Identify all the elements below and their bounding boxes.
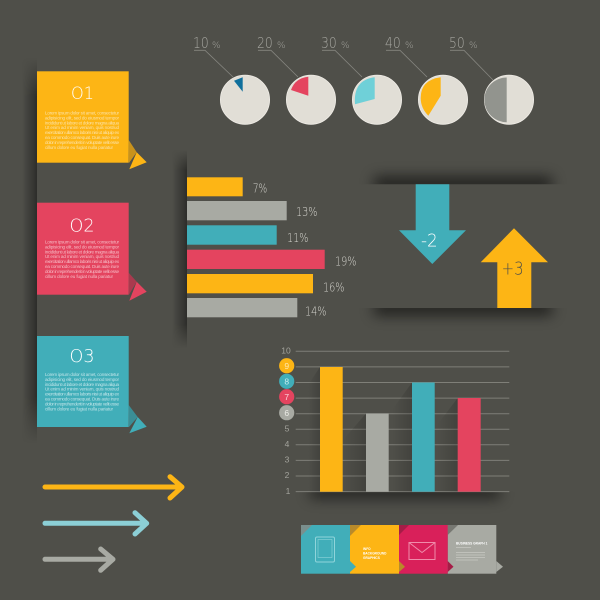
axis labels: 9 [284, 361, 289, 371]
card text: exercitation ullamco laboris nisi ut aliquip ex [45, 392, 120, 397]
axis labels: 6 [284, 408, 289, 418]
pie: 20 percent: 20 [257, 34, 273, 52]
card text: adipisicing elit, sed do eiusmod tempor [45, 244, 119, 249]
axis labels: 7 [284, 392, 289, 402]
horizontal bar chart: 16% [323, 280, 344, 294]
card tab [129, 417, 147, 433]
card text [45, 240, 120, 279]
card text: ea commodo consequat. Duis aute irure [45, 135, 119, 140]
pie: 10 percent: % [212, 41, 221, 51]
pie: 20 percent: % [277, 41, 286, 51]
step card: yellow text: INFO [363, 547, 371, 551]
card text [45, 372, 120, 411]
card tab [129, 152, 147, 169]
card text: adipisicing elit, sed do eiusmod tempor [45, 115, 119, 120]
pie: 20 percent [257, 34, 336, 124]
axis labels: 4 [285, 439, 290, 449]
card text: cillum dolore eu fugiat nulla pariatur [45, 274, 113, 279]
panel: card 01 [37, 71, 147, 169]
arrow: down: -2 [421, 230, 438, 252]
arrow: gray [45, 549, 113, 570]
card text: cillum dolore eu fugiat nulla pariatur [45, 145, 113, 150]
card text: incididunt ut labore et dolore magna aliqua [45, 120, 119, 125]
card text: Lorem ipsum dolor sit amet, consectetur [45, 110, 119, 116]
step card: teal tablet [301, 525, 356, 574]
pie: 40 percent: 40 [385, 34, 401, 52]
pie: 50 percent [449, 34, 534, 124]
horizontal bar chart: 7% [253, 182, 267, 196]
axis labels: 8 [284, 376, 289, 386]
arrow: up: +3 [502, 258, 524, 279]
panel: change arrows [374, 177, 552, 315]
panel: card 02 [37, 203, 147, 301]
card text: incididunt ut labore et dolore magna aliqua [45, 249, 119, 254]
card fold [129, 405, 138, 427]
card text: exercitation ullamco laboris nisi ut aliquip ex [45, 259, 120, 264]
horizontal bar chart: 14% [305, 304, 326, 318]
card text: Lorem ipsum dolor sit amet, consectetur [45, 240, 119, 244]
axis labels [281, 346, 291, 496]
card text: Ut enim ad minim veniam, quis nostrud [45, 125, 119, 130]
horizontal bar chart [187, 177, 356, 318]
axis labels: 2 [285, 470, 290, 480]
card text [45, 110, 120, 150]
pie: 40 percent: % [405, 41, 414, 51]
card text: incididunt ut labore et dolore magna aliqua [45, 382, 119, 387]
pie: 10 percent [193, 34, 270, 124]
card text: adipisicing elit, sed do eiusmod tempor [45, 377, 119, 382]
step card: yellow text: GRAPHICS [363, 556, 380, 560]
pie: 40 percent [385, 34, 468, 124]
pie: 30 percent [321, 34, 402, 124]
panel: step cards [301, 525, 503, 574]
panel: card 03 [37, 336, 147, 433]
step card: magenta envelope [399, 525, 454, 574]
axis labels: 1 [286, 486, 291, 496]
arrow: down [399, 184, 466, 264]
axis labels: 5 [285, 424, 290, 434]
horizontal bar chart: 19% [335, 254, 356, 268]
card tab [129, 282, 147, 301]
card text: ea commodo consequat. Duis aute irure [45, 396, 119, 402]
horizontal bar chart: 13% [296, 205, 318, 219]
arrow: up [481, 228, 548, 308]
card text: cillum dolore eu fugiat nulla pariatur [45, 406, 113, 411]
arrow: yellow [45, 477, 182, 498]
step card: yellow text: BACKGROUND [363, 552, 387, 556]
card fold [129, 140, 137, 163]
step card: gray text [448, 525, 503, 574]
axis badges [279, 358, 294, 373]
bars [320, 367, 343, 492]
card text: dolor in reprehenderit in voluptate velit esse [45, 401, 119, 406]
shadow strip left [26, 68, 37, 432]
axis labels: 3 [285, 454, 290, 464]
axis labels: 10 [281, 346, 291, 356]
card text: Ut enim ad minim veniam, quis nostrud [45, 387, 119, 392]
pie: 50 percent: % [469, 41, 478, 51]
pie: 30 percent: 30 [321, 34, 337, 52]
pie: 10 percent: 10 [193, 34, 209, 52]
panel: pie charts [193, 34, 534, 124]
pie: 30 percent: % [341, 41, 350, 51]
card text: Ut enim ad minim veniam, quis nostrud [45, 254, 119, 259]
column chart [279, 346, 509, 498]
shadow strip for bars [176, 155, 187, 342]
step card: yellow text [350, 525, 405, 574]
card text: dolor in reprehenderit in voluptate velit esse [45, 269, 119, 274]
card text: ea commodo consequat. Duis aute irure [45, 264, 119, 269]
card number: O3 [70, 346, 94, 367]
card text: Lorem ipsum dolor sit amet, consectetur [45, 372, 119, 377]
pie: 50 percent: 50 [449, 34, 465, 52]
bar shadows [308, 367, 458, 492]
card number: O2 [70, 216, 94, 236]
arrow: light teal [45, 513, 147, 534]
card fold [129, 273, 137, 295]
card text: exercitation ullamco laboris nisi ut aliquip ex [45, 130, 120, 135]
step card: gray text: BUSINESS GRAPH 1 [456, 542, 488, 546]
card text: dolor in reprehenderit in voluptate velit esse [45, 140, 119, 145]
card number: O1 [71, 84, 94, 104]
horizontal bar chart: 11% [287, 231, 308, 245]
